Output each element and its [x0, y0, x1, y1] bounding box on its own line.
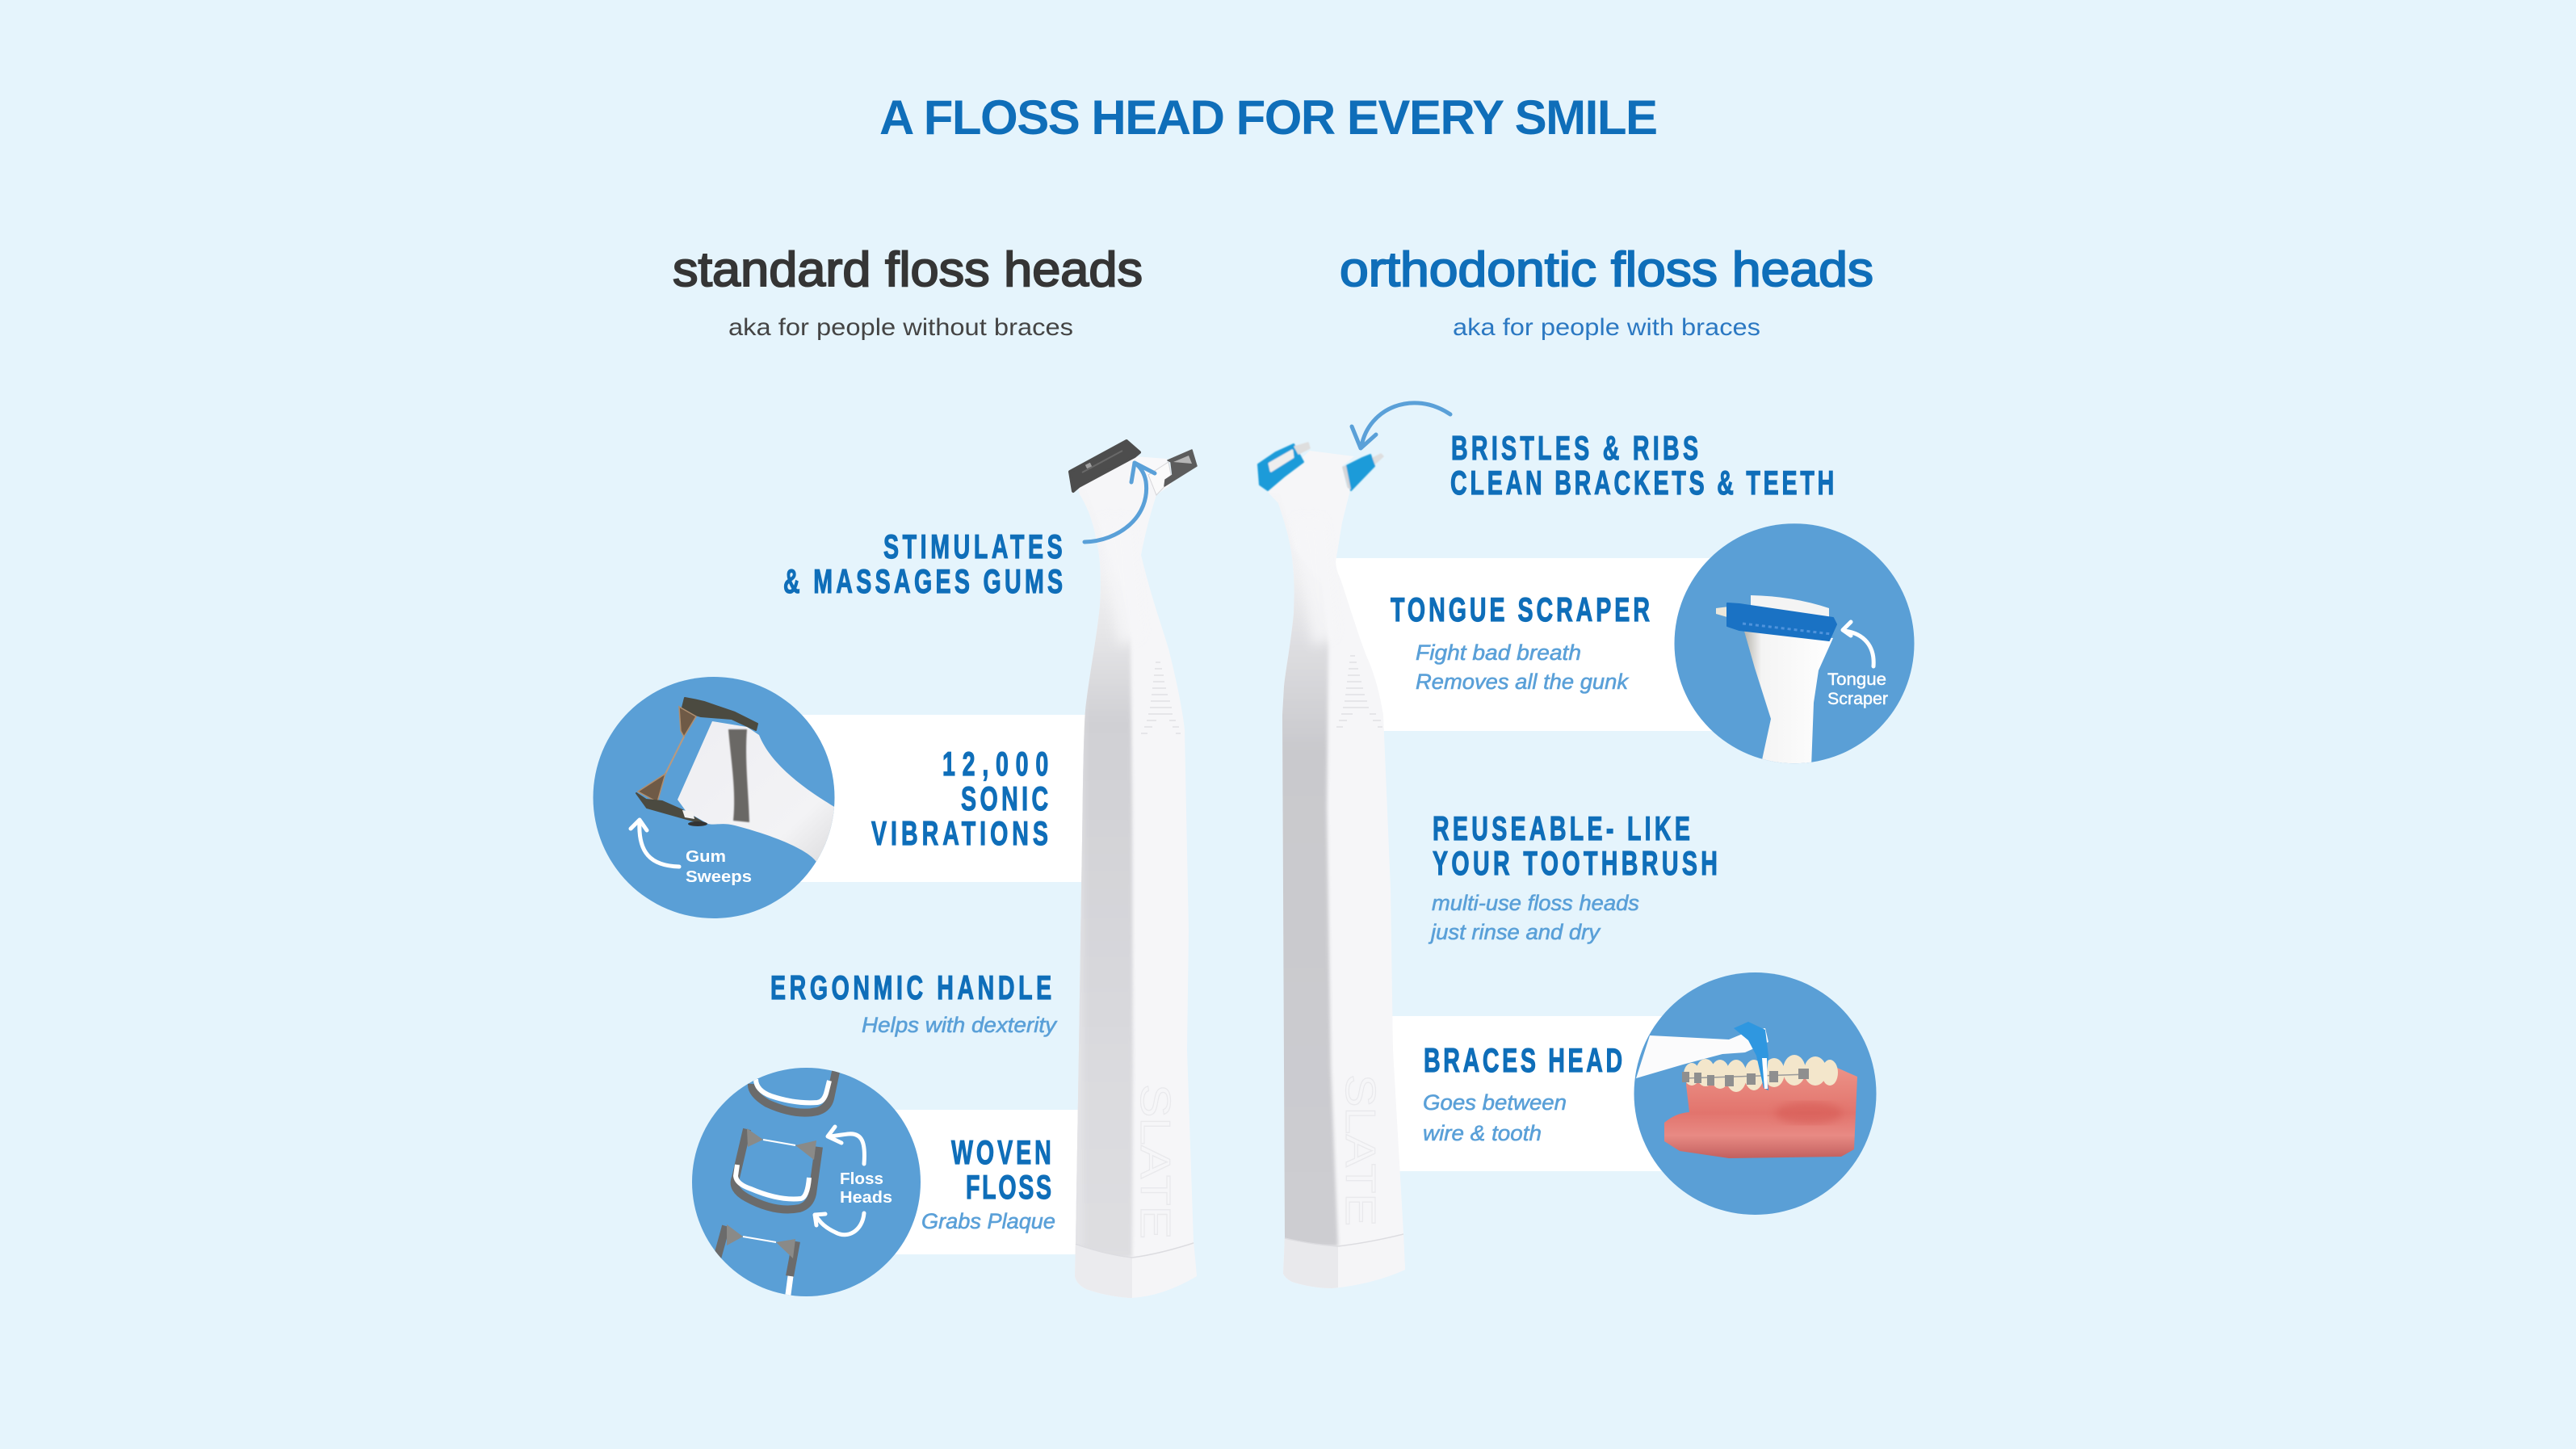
head top [752, 1068, 837, 1113]
circle: gum sweeps [593, 677, 840, 918]
heading: standard floss heads [673, 242, 1143, 341]
head lower [717, 1224, 796, 1300]
circle: floss heads [692, 1068, 921, 1300]
arrow: gum sweeps [631, 820, 679, 867]
floss head: orthodontic blue [1258, 443, 1383, 490]
heading: standard floss heads: standard floss heads [673, 242, 1143, 296]
text: 12,000 sonic vibrations [871, 744, 1048, 852]
label: tongue scraper: Tongue [1827, 670, 1886, 689]
text: ergonomic handle: Helps with dexterity [862, 1013, 1058, 1037]
text: woven floss: Grabs Plaque [921, 1209, 1055, 1233]
text: tongue scraper: TONGUE SCRAPER [1391, 590, 1650, 628]
title: A FLOSS HEAD FOR EVERY SMILE [879, 90, 1658, 145]
text: tongue scraper: Removes all the gunk [1416, 670, 1630, 694]
band: tongue scraper [1332, 558, 1785, 731]
embossed logo: SLATE [1131, 1084, 1178, 1239]
text: bristles and ribs: CLEAN BRACKETS & TEETH [1450, 463, 1834, 502]
subheading: without braces: aka for people without braces [728, 314, 1073, 341]
circle: tongue scraper: Scraper [1827, 690, 1888, 708]
text: stimulates and massages gums: STIMULATES [883, 527, 1063, 565]
brush head [1636, 1028, 1768, 1078]
label: gum sweeps: Gum [686, 848, 726, 866]
text: woven floss: WOVEN [951, 1132, 1051, 1171]
circle: floss heads: Heads [840, 1189, 892, 1207]
text: ergonomic handle [770, 968, 1058, 1037]
text: ergonomic handle: ERGONMIC HANDLE [770, 968, 1051, 1006]
subheading: with braces: aka for people with braces [1453, 314, 1760, 341]
text: stimulates and massages gums: & MASSAGES GUMS [783, 561, 1063, 600]
gum model [1664, 1068, 1857, 1158]
text: braces head [1423, 1040, 1622, 1145]
floss head: standard gray [1070, 441, 1197, 495]
text: 12,000 sonic vibrations: 12,000 [942, 744, 1048, 783]
text: bristles and ribs: BRISTLES & RIBS [1451, 428, 1698, 467]
handle ribbing [1141, 662, 1181, 733]
blue scraper band [1727, 603, 1836, 640]
text: reuseable: just rinse and dry [1428, 920, 1601, 944]
text: 12,000 sonic vibrations: SONIC [961, 779, 1048, 817]
text: 12,000 sonic vibrations: VIBRATIONS [871, 813, 1048, 852]
text: woven floss [921, 1132, 1055, 1233]
text: tongue scraper [1391, 590, 1650, 694]
arrows: floss heads [815, 1127, 864, 1235]
circle: gum sweeps: Sweeps [686, 868, 752, 886]
brush closeup [1743, 628, 1833, 767]
band: woven floss [856, 1110, 1086, 1254]
arrow: bristles and ribs [1352, 403, 1450, 448]
text: tongue scraper: Fight bad breath [1416, 640, 1581, 665]
text: stimulates and massages gums [783, 527, 1063, 600]
text: reuseable [1428, 808, 1718, 944]
band: braces head [1391, 1016, 1744, 1171]
brackets and wire [1682, 1069, 1809, 1086]
embossed logo: SLATE [1336, 1074, 1383, 1226]
text: bristles and ribs [1450, 428, 1834, 502]
text: braces head: Goes between [1423, 1090, 1567, 1115]
floss head closeup [636, 698, 840, 872]
band: sonic vibrations [767, 715, 1090, 882]
circle: tongue scraper [1675, 523, 1914, 767]
text: reuseable: multi-use floss heads [1432, 891, 1639, 915]
handle ribbing [1336, 656, 1382, 727]
heading: orthodontic floss heads: orthodontic floss heads [1340, 242, 1873, 296]
heading: orthodontic floss heads [1340, 242, 1873, 341]
text: braces head: BRACES HEAD [1424, 1040, 1622, 1079]
text: braces head: wire & tooth [1423, 1121, 1542, 1145]
toothbrush: standard [1075, 458, 1197, 1298]
label: floss heads: Floss [840, 1170, 883, 1188]
head middle [735, 1128, 819, 1209]
arrow: stimulates gums [1085, 463, 1155, 542]
toothbrush: orthodontic [1267, 451, 1405, 1288]
text: reuseable: YOUR TOOTHBRUSH [1433, 843, 1718, 882]
text: reuseable: REUSEABLE- LIKE [1433, 808, 1690, 847]
text: woven floss: FLOSS [966, 1167, 1051, 1206]
arrow: tongue scraper [1843, 622, 1873, 666]
teeth [1684, 1055, 1838, 1092]
circle: braces head [1634, 972, 1877, 1215]
